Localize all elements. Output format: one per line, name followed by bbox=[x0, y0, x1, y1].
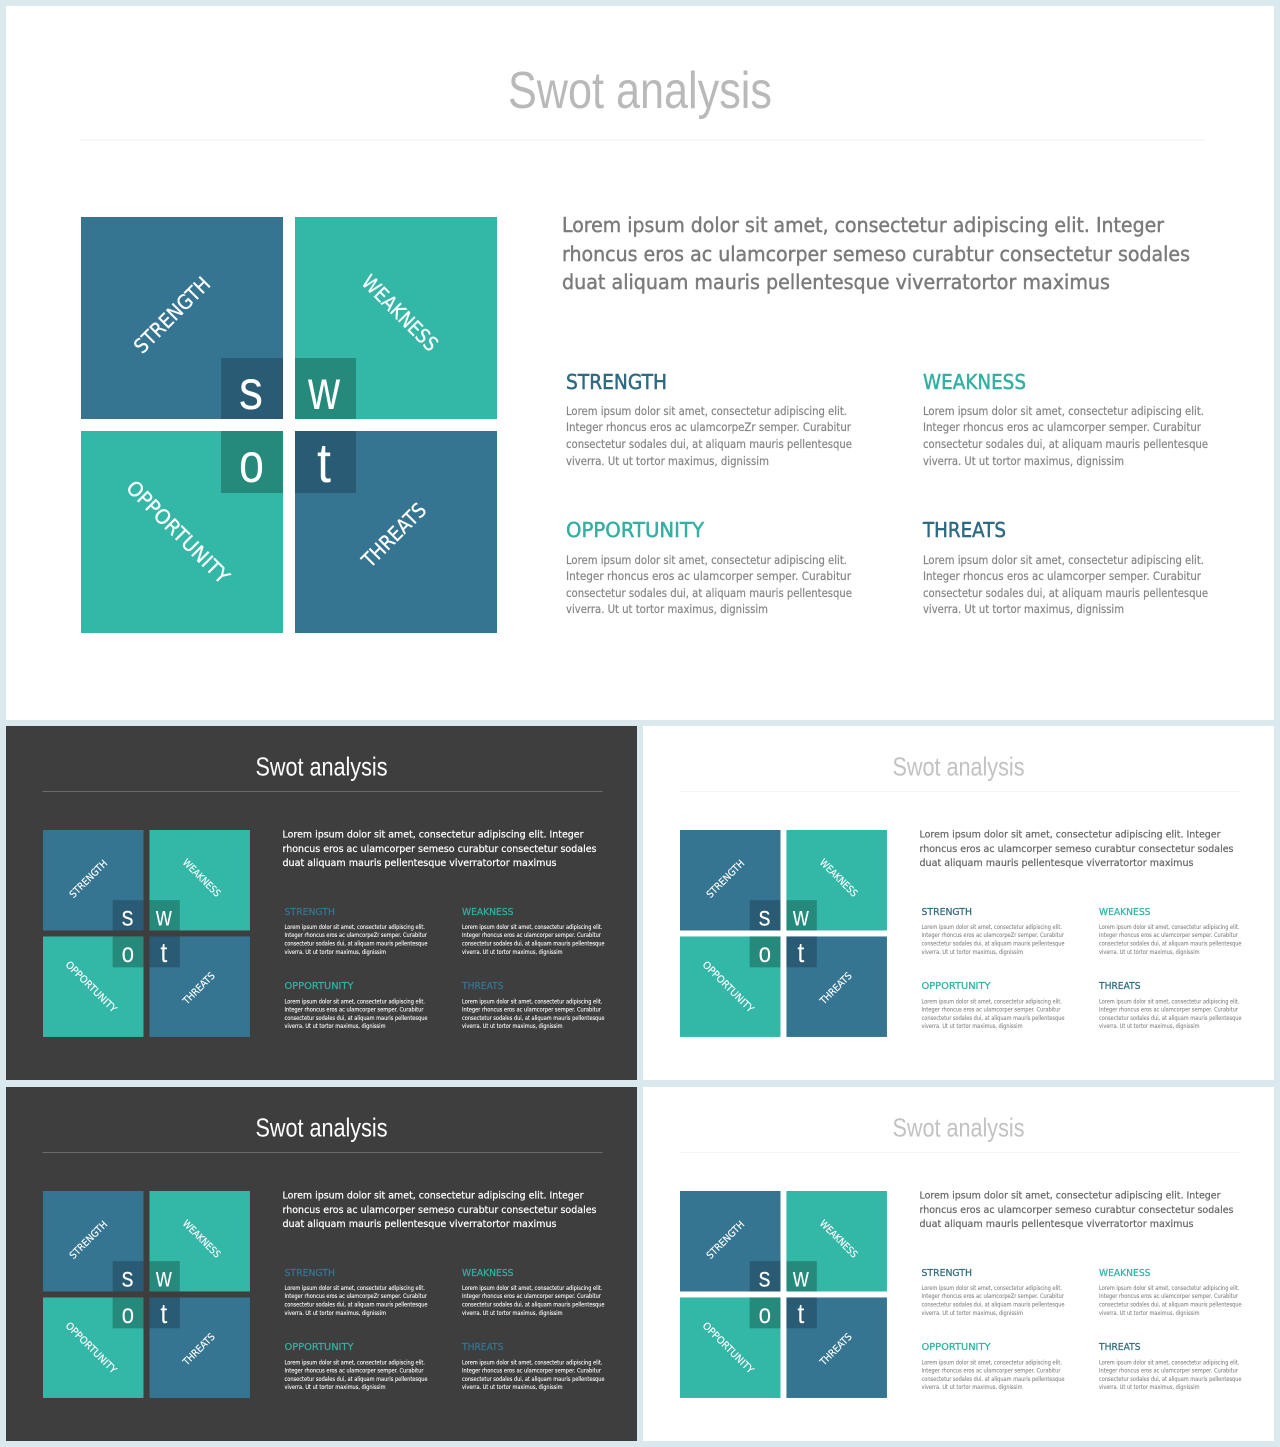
intro text: Lorem ipsum dolor sit amet, consectetur adipiscing elit. Integer bbox=[562, 213, 1165, 237]
text blocks: consectetur sodales dui, at aliquam mauris pellentesque bbox=[462, 1377, 605, 1383]
SWOT matrix: o bbox=[122, 1298, 134, 1329]
text blocks: consectetur sodales dui, at aliquam mauris pellentesque bbox=[284, 1016, 428, 1022]
panel: light slide, row 2 bbox=[643, 1087, 1274, 1441]
SWOT matrix: o bbox=[759, 937, 771, 968]
text blocks bbox=[922, 907, 1242, 1030]
text blocks: THREATS bbox=[1098, 981, 1140, 992]
text blocks: Lorem ipsum dolor sit amet, consectetur adipiscing elit. bbox=[922, 1286, 1062, 1292]
text blocks: Lorem ipsum dolor sit amet, consectetur adipiscing elit. bbox=[1099, 1286, 1240, 1292]
text blocks: viverra. Ut ut tortor maximus, dignissim bbox=[462, 1024, 563, 1030]
intro text bbox=[562, 213, 1190, 294]
text blocks: Integer rhoncus eros ac ulamcorpeZr semper. Curabitur bbox=[284, 1294, 428, 1300]
text block: strength bbox=[566, 370, 852, 468]
title: Swot analysis bbox=[892, 1112, 1024, 1142]
SWOT matrix: WEAKNESS bbox=[180, 1218, 222, 1261]
SWOT matrix: WEAKNESS bbox=[817, 857, 859, 900]
SWOT matrix: o bbox=[759, 1298, 771, 1329]
panel: dark slide, row 2 bbox=[6, 1087, 637, 1441]
text blocks: viverra. Ut ut tortor maximus, dignissim bbox=[462, 1311, 563, 1317]
text blocks: consectetur sodales dui, at aliquam mauris pellentesque bbox=[462, 1302, 605, 1308]
text block: threats: Integer rhoncus eros ac ulamcorper semper. Curabitur bbox=[923, 569, 1201, 583]
text block: threats: THREATS bbox=[922, 518, 1006, 542]
text blocks: consectetur sodales dui, at aliquam mauris pellentesque bbox=[284, 1302, 428, 1308]
text blocks: WEAKNESS bbox=[462, 1268, 514, 1279]
intro text: rhoncus eros ac ulamcorper semeso curabtur consectetur sodales bbox=[920, 844, 1234, 855]
text blocks: THREATS bbox=[1098, 1342, 1140, 1353]
quadrant: opportunity: OPPORTUNITY bbox=[121, 475, 235, 589]
intro text: rhoncus eros ac ulamcorper semeso curabtur consectetur sodales bbox=[920, 1205, 1234, 1216]
text blocks: Integer rhoncus eros ac ulamcorper semper. Curabitur bbox=[284, 1368, 424, 1374]
quadrant: threats: t bbox=[317, 431, 331, 494]
text block: strength: STRENGTH bbox=[566, 370, 667, 394]
text blocks bbox=[284, 1268, 605, 1391]
text block: weakness: viverra. Ut ut tortor maximus, dignissim bbox=[923, 454, 1124, 468]
text blocks: Lorem ipsum dolor sit amet, consectetur adipiscing elit. bbox=[462, 1286, 603, 1292]
SWOT matrix: THREATS bbox=[181, 1332, 218, 1369]
text blocks: Integer rhoncus eros ac ulamcorper semper. Curabitur bbox=[922, 1008, 1061, 1014]
text blocks: Integer rhoncus eros ac ulamcorper semper. Curabitur bbox=[462, 1368, 602, 1374]
quadrant: strength: s bbox=[239, 358, 263, 421]
SWOT matrix: w bbox=[155, 901, 173, 932]
SWOT matrix: t bbox=[160, 1298, 168, 1329]
text blocks: viverra. Ut ut tortor maximus, dignissim bbox=[462, 1385, 563, 1391]
SWOT matrix: s bbox=[122, 901, 134, 932]
title: Swot analysis bbox=[256, 752, 388, 782]
intro text: Lorem ipsum dolor sit amet, consectetur adipiscing elit. Integer bbox=[920, 1190, 1221, 1202]
text block: weakness bbox=[923, 370, 1208, 468]
text blocks: Lorem ipsum dolor sit amet, consectetur adipiscing elit. bbox=[284, 1360, 425, 1366]
text blocks: Lorem ipsum dolor sit amet, consectetur adipiscing elit. bbox=[462, 1000, 603, 1006]
text blocks: OPPORTUNITY bbox=[284, 981, 354, 992]
text block: threats: consectetur sodales dui, at aliquam mauris pellentesque bbox=[923, 586, 1208, 600]
text blocks: Integer rhoncus eros ac ulamcorper semper. Curabitur bbox=[462, 933, 602, 939]
text blocks: consectetur sodales dui, at aliquam mauris pellentesque bbox=[462, 1016, 605, 1022]
intro text: Lorem ipsum dolor sit amet, consectetur adipiscing elit. Integer bbox=[282, 1190, 584, 1202]
SWOT matrix: t bbox=[797, 1298, 805, 1329]
text blocks: viverra. Ut ut tortor maximus, dignissim bbox=[462, 950, 563, 956]
text blocks: consectetur sodales dui, at aliquam mauris pellentesque bbox=[922, 1377, 1065, 1383]
text blocks: Integer rhoncus eros ac ulamcorpeZr semper. Curabitur bbox=[284, 933, 428, 939]
text blocks: WEAKNESS bbox=[462, 907, 514, 918]
text blocks: consectetur sodales dui, at aliquam mauris pellentesque bbox=[462, 942, 605, 948]
SWOT matrix: OPPORTUNITY bbox=[700, 960, 756, 1016]
intro text: duat aliquam mauris pellentesque viverratortor maximus bbox=[282, 1219, 556, 1230]
text blocks: Integer rhoncus eros ac ulamcorper semper. Curabitur bbox=[462, 1294, 602, 1300]
intro text: duat aliquam mauris pellentesque viverratortor maximus bbox=[562, 270, 1110, 294]
text blocks: Integer rhoncus eros ac ulamcorper semper. Curabitur bbox=[1099, 933, 1239, 939]
title: Swot analysis bbox=[508, 62, 772, 120]
SWOT matrix: THREATS bbox=[181, 971, 218, 1008]
text blocks: Integer rhoncus eros ac ulamcorper semper. Curabitur bbox=[1099, 1368, 1239, 1374]
text blocks: Integer rhoncus eros ac ulamcorper semper. Curabitur bbox=[922, 1368, 1061, 1374]
intro text bbox=[920, 830, 1234, 869]
SWOT matrix: THREATS bbox=[818, 971, 855, 1008]
panel: light slide, row 1 bbox=[643, 726, 1274, 1080]
quadrant: threats bbox=[295, 431, 497, 633]
SWOT matrix bbox=[680, 1191, 887, 1398]
text block: opportunity: OPPORTUNITY bbox=[566, 518, 705, 542]
text blocks: viverra. Ut ut tortor maximus, dignissim bbox=[1099, 1311, 1200, 1317]
quadrant: weakness: w bbox=[307, 358, 340, 421]
text blocks: Lorem ipsum dolor sit amet, consectetur adipiscing elit. bbox=[284, 925, 425, 931]
text blocks: Integer rhoncus eros ac ulamcorper semper. Curabitur bbox=[1099, 1008, 1239, 1014]
SWOT matrix bbox=[43, 830, 250, 1037]
text blocks: viverra. Ut ut tortor maximus, dignissim bbox=[922, 1311, 1023, 1317]
text blocks: consectetur sodales dui, at aliquam mauris pellentesque bbox=[1099, 1377, 1242, 1383]
SWOT matrix: OPPORTUNITY bbox=[63, 960, 119, 1016]
text block: opportunity: Lorem ipsum dolor sit amet, consectetur adipiscing elit. bbox=[566, 553, 847, 567]
text block: threats: viverra. Ut ut tortor maximus, dignissim bbox=[923, 602, 1124, 616]
text blocks: consectetur sodales dui, at aliquam mauris pellentesque bbox=[922, 1302, 1065, 1308]
text blocks: Lorem ipsum dolor sit amet, consectetur adipiscing elit. bbox=[284, 1286, 425, 1292]
text blocks: viverra. Ut ut tortor maximus, dignissim bbox=[922, 1385, 1023, 1391]
text blocks: OPPORTUNITY bbox=[922, 1342, 991, 1353]
text blocks: STRENGTH bbox=[922, 1268, 972, 1279]
SWOT matrix bbox=[81, 217, 497, 633]
quadrant: weakness: WEAKNESS bbox=[357, 270, 443, 356]
text block: threats: Lorem ipsum dolor sit amet, consectetur adipiscing elit. bbox=[923, 553, 1204, 567]
text blocks: viverra. Ut ut tortor maximus, dignissim bbox=[1099, 950, 1200, 956]
text blocks: viverra. Ut ut tortor maximus, dignissim bbox=[284, 1024, 386, 1030]
text blocks: Lorem ipsum dolor sit amet, consectetur adipiscing elit. bbox=[462, 1360, 603, 1366]
SWOT matrix: OPPORTUNITY bbox=[700, 1321, 756, 1377]
text blocks: viverra. Ut ut tortor maximus, dignissim bbox=[922, 950, 1023, 956]
title: Swot analysis bbox=[256, 1112, 388, 1142]
SWOT matrix: w bbox=[792, 1262, 810, 1293]
intro text: Lorem ipsum dolor sit amet, consectetur adipiscing elit. Integer bbox=[920, 830, 1221, 840]
quadrant: strength bbox=[81, 217, 283, 421]
text blocks: OPPORTUNITY bbox=[922, 981, 991, 992]
text blocks: THREATS bbox=[461, 981, 504, 992]
SWOT matrix: t bbox=[160, 937, 168, 968]
text block: opportunity bbox=[566, 518, 852, 616]
SWOT matrix: s bbox=[759, 1262, 771, 1293]
text blocks: STRENGTH bbox=[922, 907, 972, 918]
text blocks bbox=[284, 907, 605, 1030]
SWOT matrix: s bbox=[122, 1262, 134, 1293]
SWOT matrix: w bbox=[155, 1262, 173, 1293]
text blocks: Integer rhoncus eros ac ulamcorper semper. Curabitur bbox=[284, 1008, 424, 1014]
intro text: rhoncus eros ac ulamcorper semeso curabtur consectetur sodales bbox=[562, 242, 1190, 266]
text blocks: consectetur sodales dui, at aliquam mauris pellentesque bbox=[284, 1377, 428, 1383]
text block: strength: consectetur sodales dui, at aliquam mauris pellentesque bbox=[566, 437, 852, 451]
text blocks: WEAKNESS bbox=[1099, 907, 1150, 918]
text block: weakness: Integer rhoncus eros ac ulamcorper semper. Curabitur bbox=[923, 420, 1201, 434]
SWOT matrix bbox=[43, 1191, 250, 1398]
text blocks bbox=[922, 1268, 1242, 1391]
SWOT matrix: w bbox=[792, 901, 810, 932]
text blocks: Lorem ipsum dolor sit amet, consectetur adipiscing elit. bbox=[462, 925, 603, 931]
SWOT matrix: o bbox=[122, 937, 134, 968]
intro text bbox=[282, 1190, 596, 1230]
text blocks: viverra. Ut ut tortor maximus, dignissim bbox=[922, 1024, 1023, 1030]
SWOT matrix: STRENGTH bbox=[705, 858, 747, 901]
text blocks: Lorem ipsum dolor sit amet, consectetur adipiscing elit. bbox=[922, 1000, 1062, 1006]
SWOT matrix: STRENGTH bbox=[68, 1219, 110, 1262]
text blocks: Lorem ipsum dolor sit amet, consectetur adipiscing elit. bbox=[1099, 1360, 1240, 1366]
intro text: rhoncus eros ac ulamcorper semeso curabtur consectetur sodales bbox=[282, 844, 596, 855]
text block: threats bbox=[922, 518, 1208, 616]
quadrant: threats: THREATS bbox=[356, 498, 431, 573]
text blocks: OPPORTUNITY bbox=[284, 1342, 354, 1353]
text block: strength: Lorem ipsum dolor sit amet, consectetur adipiscing elit. bbox=[566, 404, 847, 418]
SWOT matrix: THREATS bbox=[818, 1332, 855, 1369]
text blocks: Lorem ipsum dolor sit amet, consectetur adipiscing elit. bbox=[284, 1000, 425, 1006]
quadrant: opportunity: o bbox=[239, 431, 264, 494]
text block: opportunity: consectetur sodales dui, at aliquam mauris pellentesque bbox=[566, 586, 852, 600]
quadrant: opportunity bbox=[81, 431, 283, 633]
SWOT matrix: t bbox=[797, 937, 805, 968]
title: Swot analysis bbox=[892, 752, 1024, 782]
text blocks: viverra. Ut ut tortor maximus, dignissim bbox=[284, 950, 386, 956]
intro text: Lorem ipsum dolor sit amet, consectetur adipiscing elit. Integer bbox=[282, 830, 584, 840]
text blocks: Lorem ipsum dolor sit amet, consectetur adipiscing elit. bbox=[1099, 925, 1240, 931]
quadrant: weakness bbox=[295, 217, 497, 421]
text block: opportunity: viverra. Ut ut tortor maximus, dignissim bbox=[566, 602, 768, 616]
quadrant: strength: STRENGTH bbox=[129, 272, 215, 358]
text blocks: Lorem ipsum dolor sit amet, consectetur adipiscing elit. bbox=[922, 925, 1062, 931]
text blocks: THREATS bbox=[461, 1342, 504, 1353]
SWOT matrix: STRENGTH bbox=[705, 1219, 747, 1262]
text blocks: STRENGTH bbox=[284, 907, 335, 918]
SWOT matrix bbox=[680, 830, 887, 1037]
text blocks: viverra. Ut ut tortor maximus, dignissim bbox=[284, 1311, 386, 1317]
text blocks: Integer rhoncus eros ac ulamcorpeZr semper. Curabitur bbox=[922, 1294, 1065, 1300]
text blocks: Integer rhoncus eros ac ulamcorper semper. Curabitur bbox=[462, 1008, 602, 1014]
text block: weakness: WEAKNESS bbox=[923, 370, 1026, 394]
text blocks: consectetur sodales dui, at aliquam mauris pellentesque bbox=[284, 942, 428, 948]
panel: dark slide, row 1 bbox=[6, 726, 637, 1080]
text block: opportunity: Integer rhoncus eros ac ulamcorper semper. Curabitur bbox=[566, 569, 851, 583]
SWOT matrix: WEAKNESS bbox=[817, 1218, 859, 1261]
panel: large light slide bbox=[6, 6, 1274, 720]
intro text: duat aliquam mauris pellentesque viverratortor maximus bbox=[920, 858, 1194, 869]
text blocks: WEAKNESS bbox=[1099, 1268, 1150, 1279]
text blocks: viverra. Ut ut tortor maximus, dignissim bbox=[1099, 1024, 1200, 1030]
SWOT matrix: s bbox=[759, 901, 771, 932]
text blocks: consectetur sodales dui, at aliquam mauris pellentesque bbox=[922, 1016, 1065, 1022]
text blocks: consectetur sodales dui, at aliquam mauris pellentesque bbox=[922, 942, 1065, 948]
text blocks: consectetur sodales dui, at aliquam mauris pellentesque bbox=[1099, 1302, 1242, 1308]
text blocks: Lorem ipsum dolor sit amet, consectetur adipiscing elit. bbox=[922, 1360, 1062, 1366]
text blocks: Lorem ipsum dolor sit amet, consectetur adipiscing elit. bbox=[1099, 1000, 1240, 1006]
SWOT matrix: STRENGTH bbox=[68, 858, 110, 901]
SWOT matrix: WEAKNESS bbox=[180, 857, 222, 900]
intro text bbox=[920, 1190, 1234, 1230]
intro text: duat aliquam mauris pellentesque viverratortor maximus bbox=[920, 1219, 1194, 1230]
text block: weakness: consectetur sodales dui, at aliquam mauris pellentesque bbox=[923, 437, 1208, 451]
intro text: rhoncus eros ac ulamcorper semeso curabtur consectetur sodales bbox=[282, 1205, 596, 1216]
intro text bbox=[282, 830, 596, 869]
text blocks: consectetur sodales dui, at aliquam mauris pellentesque bbox=[1099, 942, 1242, 948]
text block: strength: viverra. Ut ut tortor maximus, dignissim bbox=[566, 454, 769, 468]
text block: weakness: Lorem ipsum dolor sit amet, consectetur adipiscing elit. bbox=[923, 404, 1204, 418]
text blocks: Integer rhoncus eros ac ulamcorper semper. Curabitur bbox=[1099, 1294, 1239, 1300]
text blocks: STRENGTH bbox=[284, 1268, 335, 1279]
SWOT matrix: OPPORTUNITY bbox=[63, 1321, 119, 1377]
text blocks: viverra. Ut ut tortor maximus, dignissim bbox=[1099, 1385, 1200, 1391]
text blocks: consectetur sodales dui, at aliquam mauris pellentesque bbox=[1099, 1016, 1242, 1022]
intro text: duat aliquam mauris pellentesque viverratortor maximus bbox=[282, 858, 556, 869]
text blocks: viverra. Ut ut tortor maximus, dignissim bbox=[284, 1385, 386, 1391]
text blocks: Integer rhoncus eros ac ulamcorpeZr semper. Curabitur bbox=[922, 933, 1065, 939]
text block: strength: Integer rhoncus eros ac ulamcorpeZr semper. Curabitur bbox=[566, 420, 851, 434]
